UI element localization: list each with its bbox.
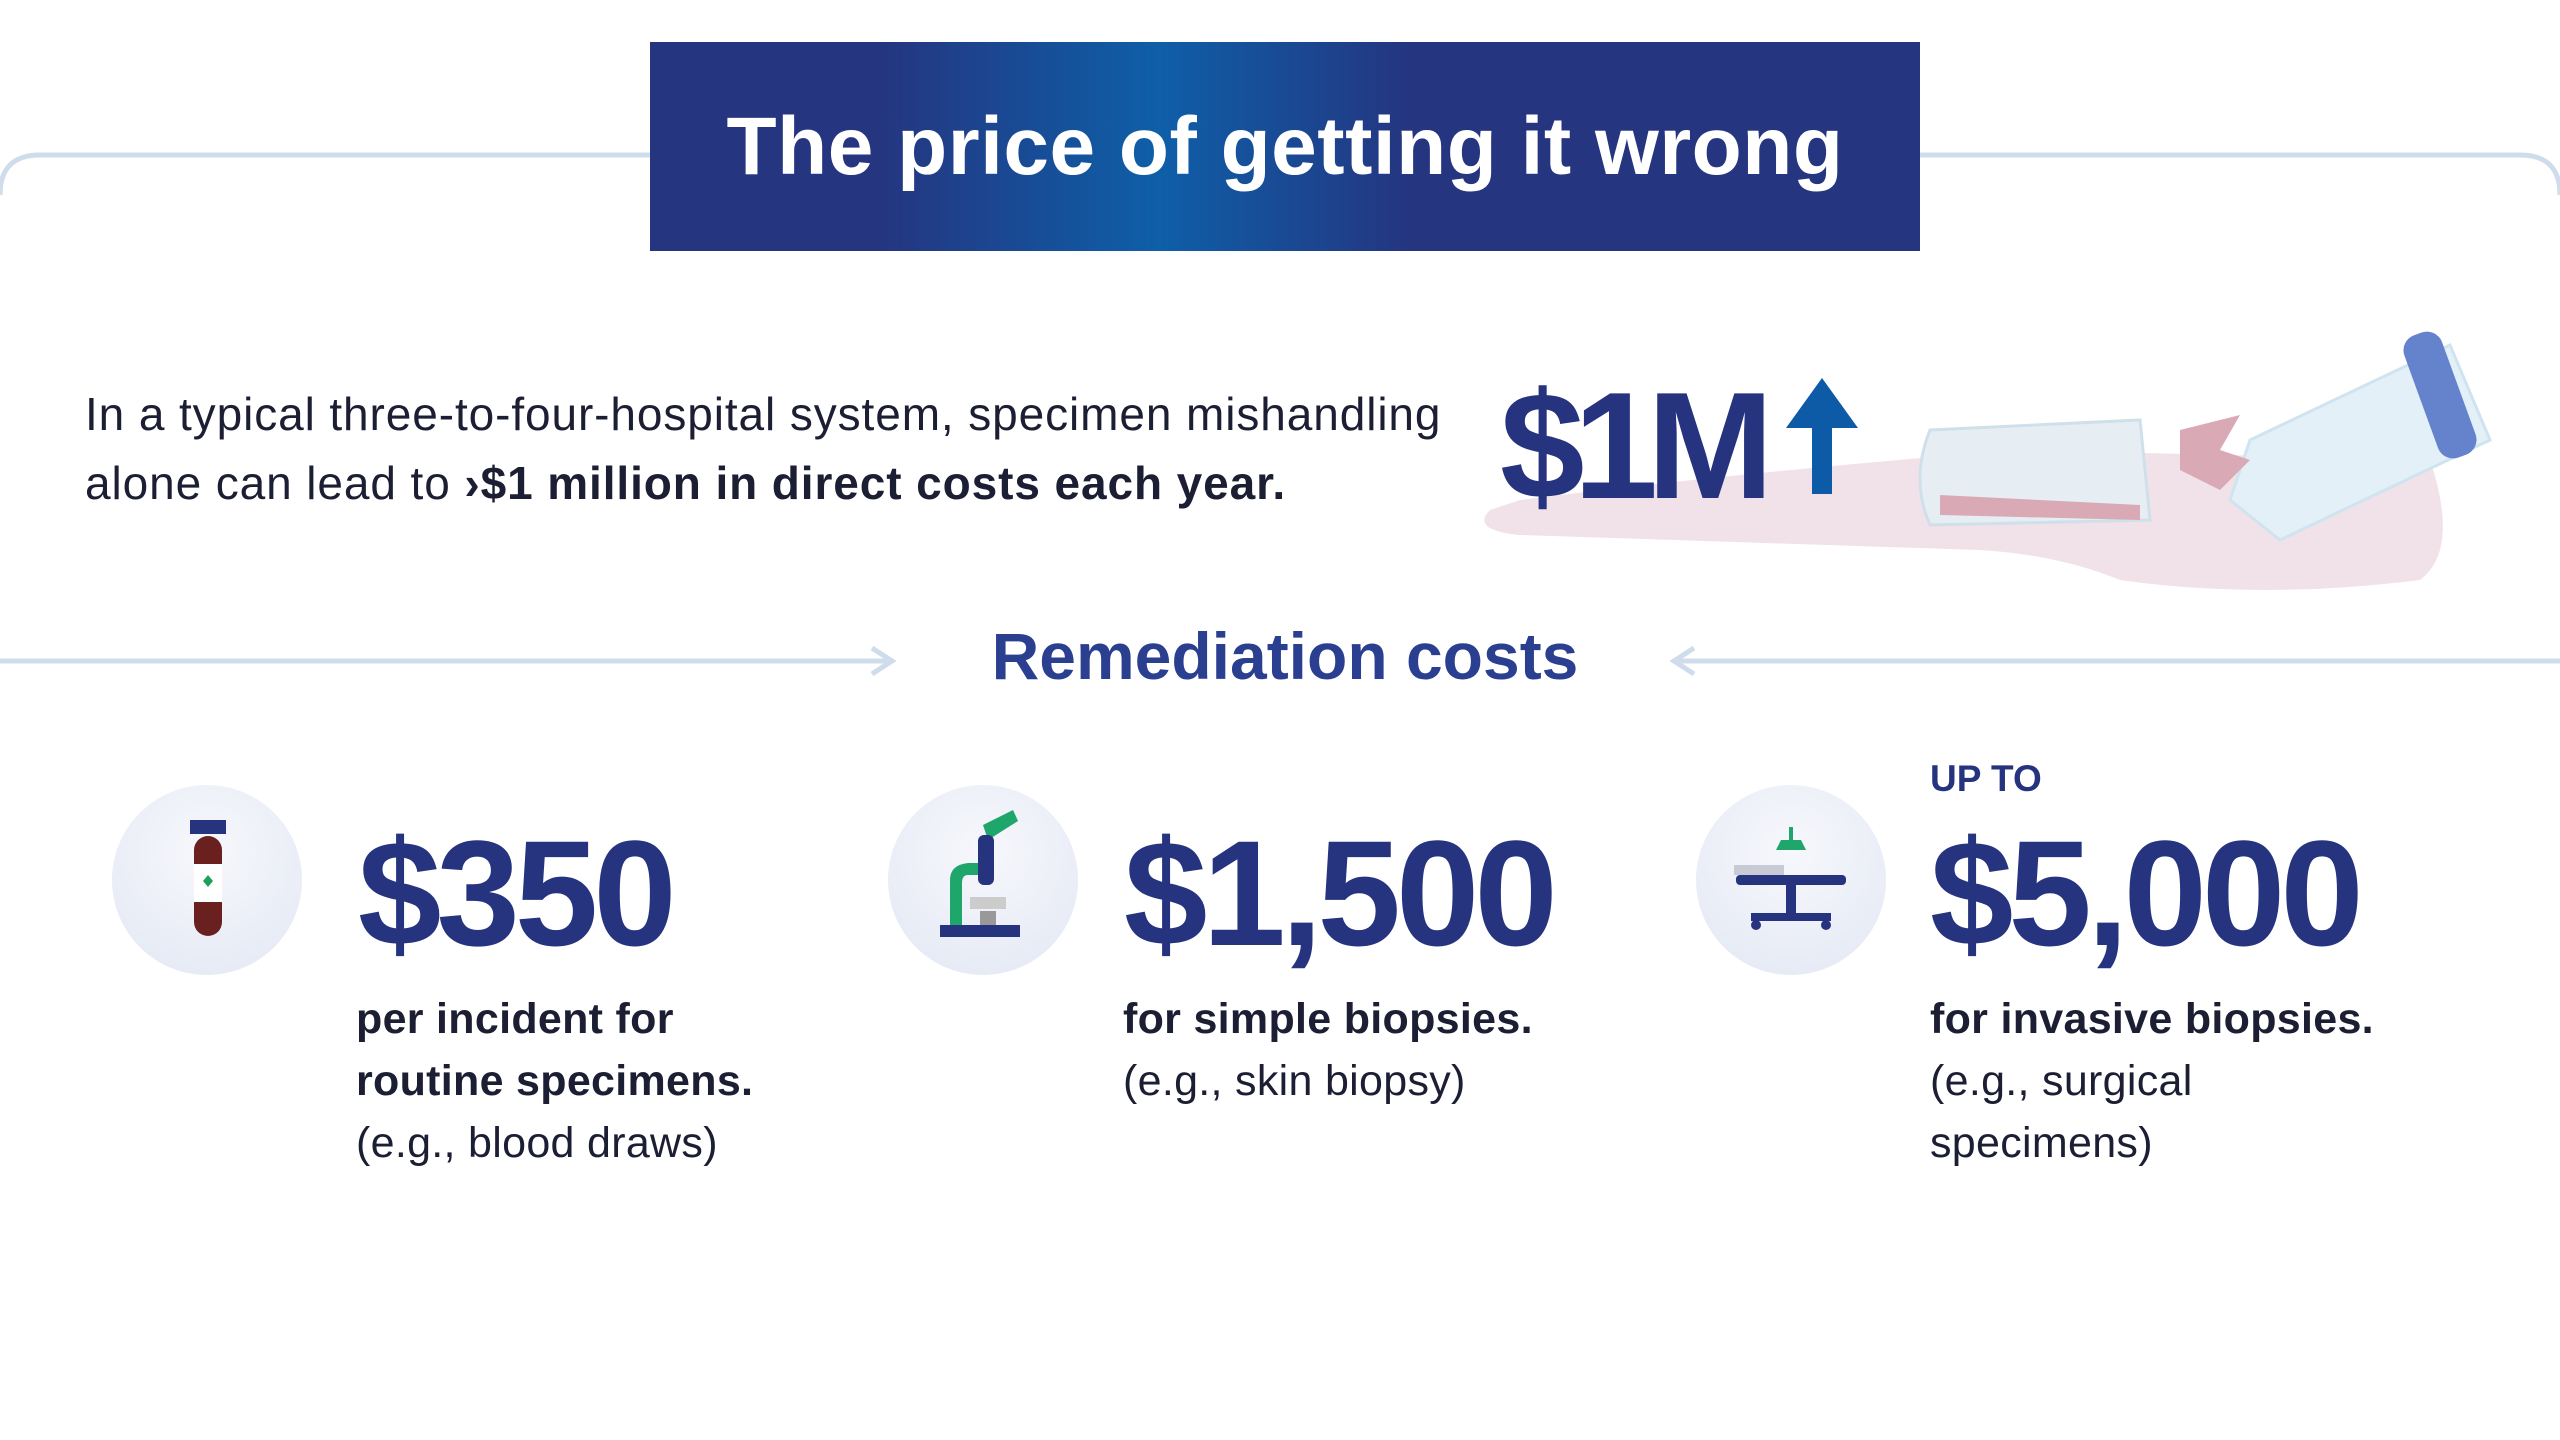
illustration: broken specimen tube	[1484, 332, 2492, 590]
description: for invasive biopsies.	[1930, 995, 2374, 1043]
value: $5,000	[1930, 809, 2359, 977]
section divider arrows	[0, 646, 2560, 676]
card 2	[888, 785, 1553, 1105]
icon: microscope	[888, 785, 1078, 975]
intro text: In a typical three-to-four-hospital system, specimen mishandling	[85, 388, 1441, 440]
value: $1,500	[1124, 809, 1553, 977]
title banner: The price of getting it wrong	[727, 101, 1843, 192]
description: (e.g., blood draws)	[356, 1119, 718, 1167]
stat: $1M: $1M	[1500, 361, 1763, 531]
description	[1930, 995, 2374, 1167]
card 3	[1696, 758, 2374, 1167]
title banner	[650, 42, 1920, 251]
icon: surgical table	[1696, 785, 1886, 975]
description: (e.g., surgical	[1930, 1057, 2193, 1105]
description: (e.g., skin biopsy)	[1123, 1057, 1466, 1105]
icon: blood tube	[112, 785, 302, 975]
intro text	[85, 388, 1441, 509]
label: up to: UP TO	[1930, 758, 2042, 799]
intro text: alone can lead to ›$1 million in direct costs each year.	[85, 457, 1286, 509]
description	[1123, 995, 1533, 1105]
heading: Remediation costs: Remediation costs	[992, 619, 1578, 693]
card 1	[112, 785, 753, 1167]
description	[356, 995, 753, 1167]
description: per incident for	[356, 995, 674, 1043]
value: $350	[358, 809, 672, 977]
icon: up arrow	[1786, 378, 1858, 494]
description: for simple biopsies.	[1123, 995, 1533, 1043]
description: routine specimens.	[356, 1057, 753, 1105]
description: specimens)	[1930, 1119, 2153, 1167]
